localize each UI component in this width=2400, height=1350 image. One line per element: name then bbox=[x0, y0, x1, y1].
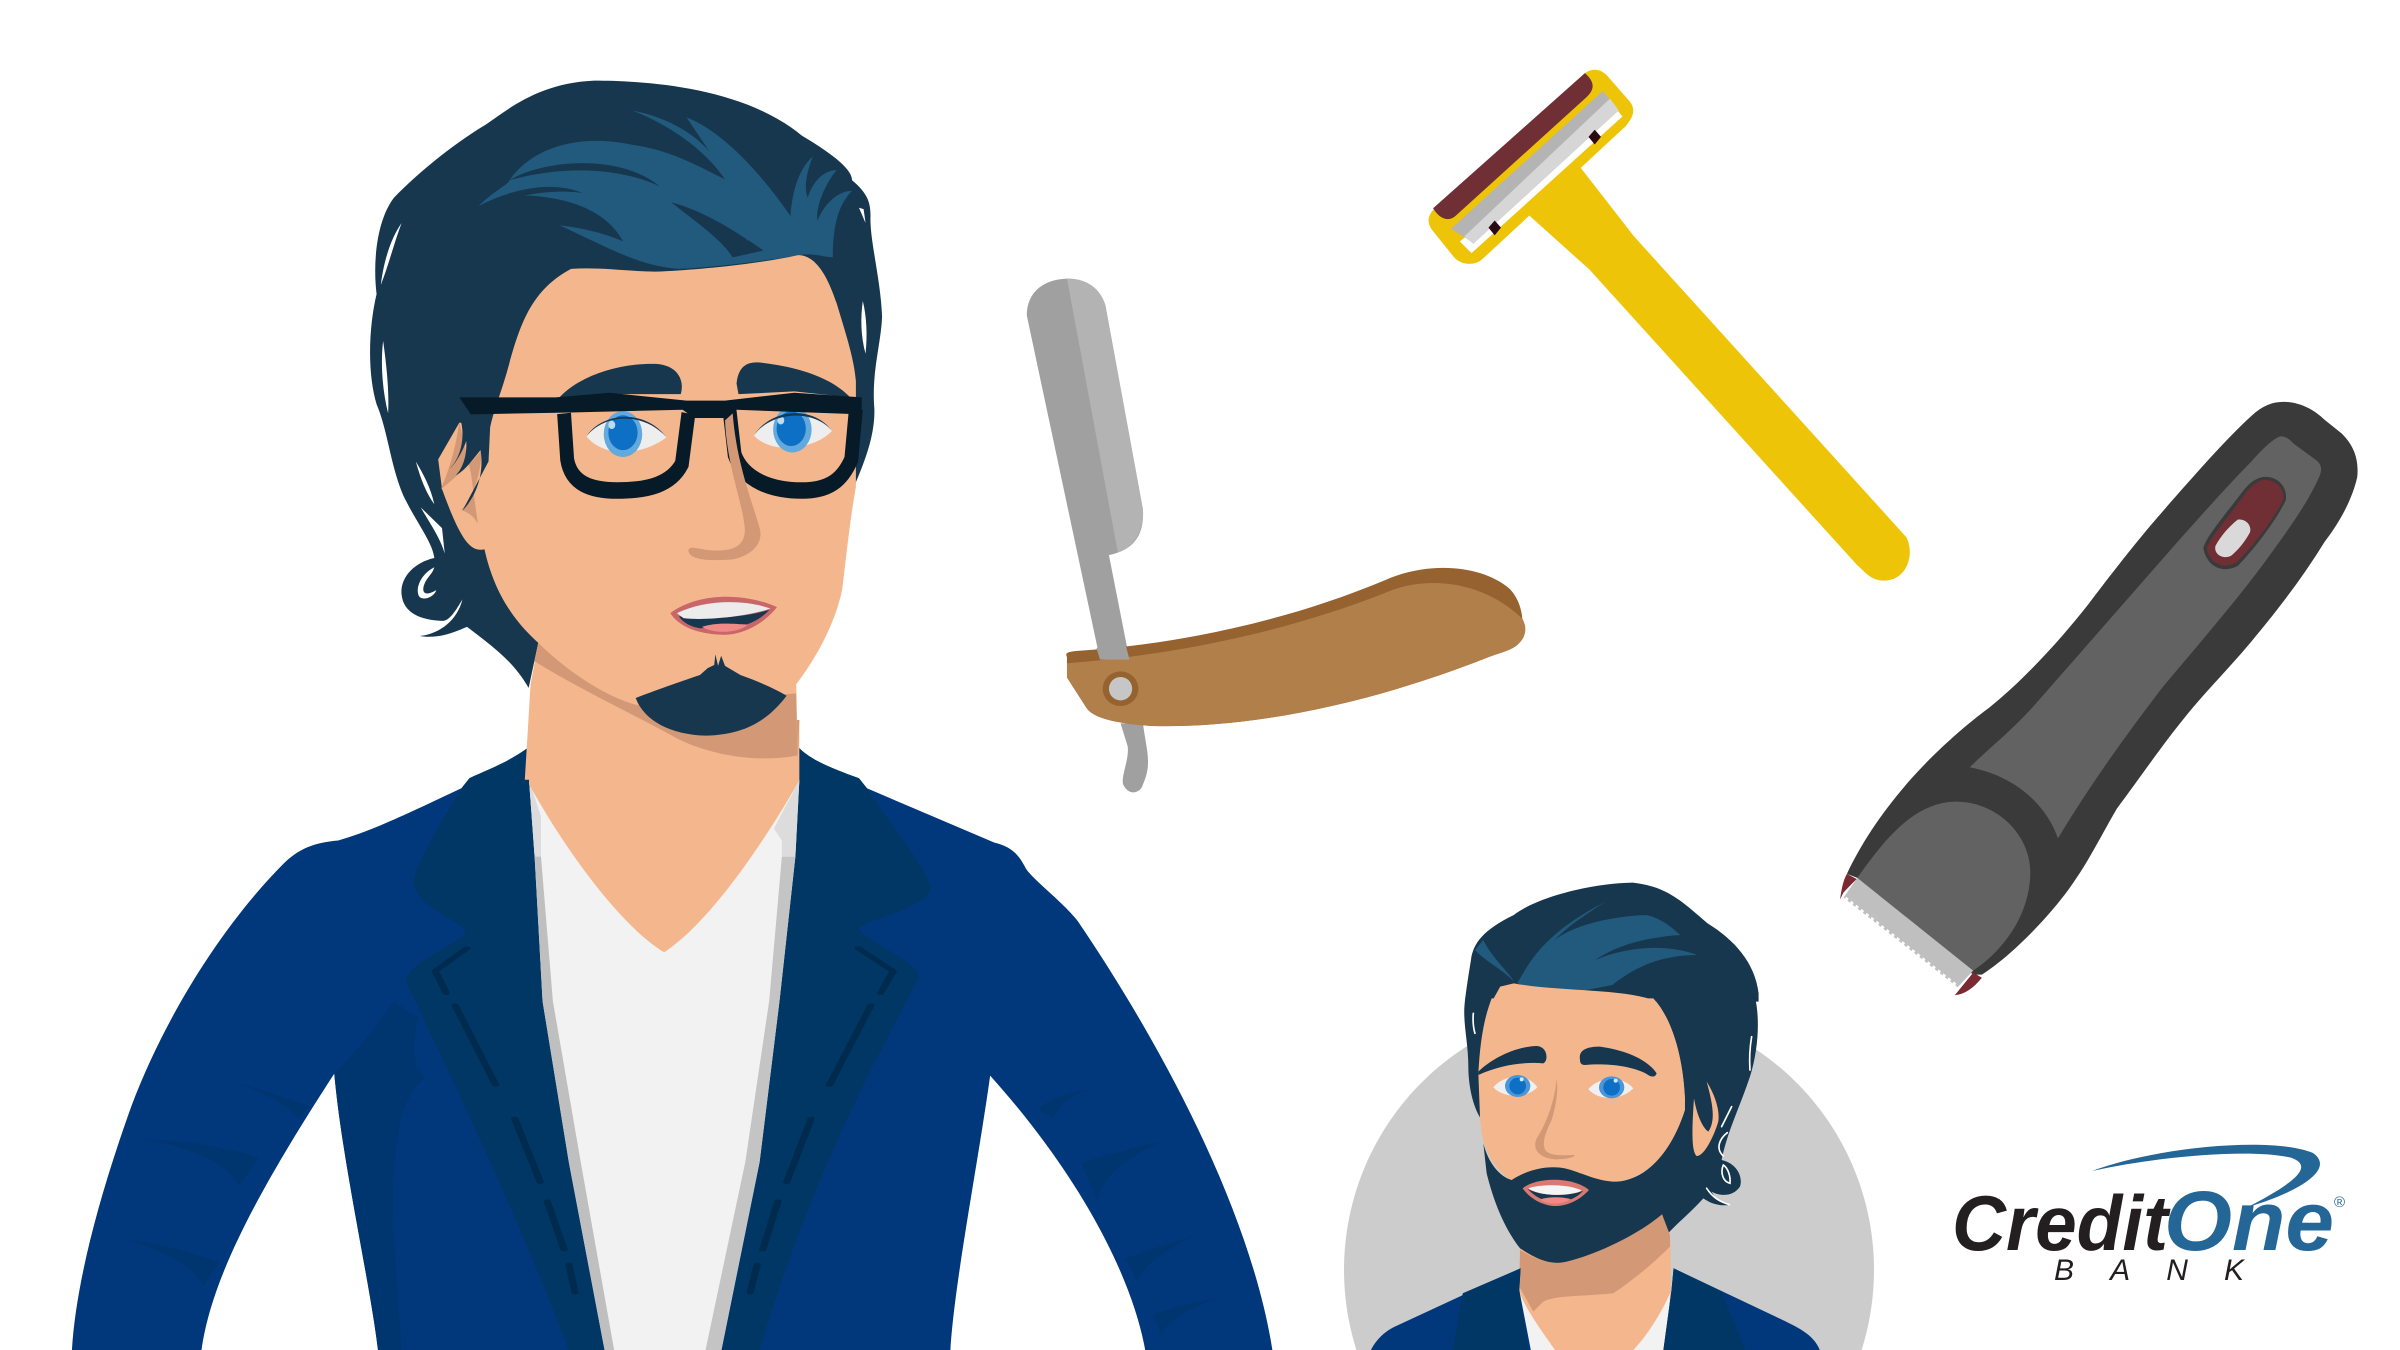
ear bbox=[1692, 1082, 1719, 1156]
forehead bbox=[1490, 983, 1660, 1005]
eyes bbox=[1493, 1075, 1633, 1098]
nose bbox=[688, 413, 760, 560]
hair highlight bbox=[479, 110, 852, 269]
mouth bbox=[1523, 1180, 1589, 1206]
clipper head bbox=[1857, 802, 2030, 971]
hair shine bbox=[1473, 1013, 1752, 1205]
hair highlight bbox=[1517, 902, 1697, 992]
left hair strip bbox=[1464, 998, 1493, 1117]
eyes bbox=[586, 407, 832, 457]
small jacket bbox=[1371, 1268, 1820, 1350]
BANK text: BANK bbox=[2054, 1254, 2246, 1287]
right hair and curl bbox=[1653, 998, 1758, 1235]
electric clipper bbox=[1840, 402, 2358, 995]
ear bbox=[438, 423, 494, 550]
small bearded man in grey circle bbox=[1344, 883, 1874, 1350]
face bbox=[1478, 998, 1685, 1182]
eyebrows bbox=[559, 364, 682, 397]
neck shadow bbox=[1519, 1213, 1670, 1312]
grey circle bbox=[1344, 1005, 1874, 1350]
clipper face panel bbox=[1970, 436, 2321, 838]
logo: Credit One Bank bbox=[1952, 1145, 2345, 1287]
neck bbox=[1519, 1213, 1671, 1350]
hair shine streaks bbox=[381, 208, 867, 599]
glasses bbox=[459, 393, 862, 491]
large man with goatee and glasses bbox=[72, 81, 1272, 1350]
mouth bbox=[670, 597, 777, 635]
shirt bbox=[1518, 1288, 1670, 1350]
beard bbox=[1483, 1110, 1693, 1263]
clipper body bbox=[1847, 402, 2358, 975]
goatee bbox=[636, 654, 787, 736]
disposable razor bbox=[1429, 70, 1910, 581]
lapel stitching bbox=[435, 948, 893, 1293]
clipper red tips bbox=[1840, 874, 1982, 995]
face and neck bbox=[484, 255, 856, 780]
logo swoosh bbox=[2092, 1145, 2320, 1207]
jaw shadow bbox=[534, 643, 797, 758]
head bbox=[370, 81, 882, 780]
clipper switch bbox=[2203, 477, 2286, 569]
hair bbox=[370, 81, 882, 688]
straight razor bbox=[1027, 279, 1525, 792]
upper head bbox=[1465, 883, 1759, 1005]
sleeve folds bbox=[128, 1082, 1217, 1335]
eyebrows bbox=[1478, 1046, 1546, 1075]
jacket and shirt bbox=[72, 720, 1272, 1350]
clipper blade bbox=[1841, 878, 1973, 990]
hair top bbox=[1465, 883, 1759, 1002]
Credit wordmark: Credit bbox=[1952, 1179, 2171, 1267]
lower head and torso bbox=[1464, 998, 1758, 1350]
nose bbox=[1535, 1078, 1575, 1159]
One wordmark: One bbox=[2164, 1174, 2334, 1268]
registered mark: ® bbox=[2334, 1194, 2345, 1211]
